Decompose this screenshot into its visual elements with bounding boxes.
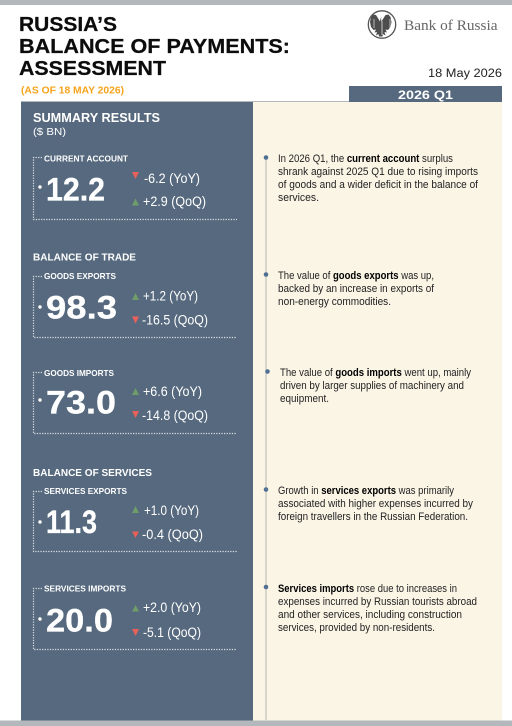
metric: current account	[34, 154, 237, 220]
commentary: goods imports: The value of goods imports went up, mainly	[280, 367, 472, 379]
metric: goods exports: GOODS EXPORTS	[44, 272, 117, 281]
metric: goods imports: +6.6 (YoY)	[143, 384, 202, 399]
metric: goods imports	[34, 369, 237, 434]
metric: current account: -6.2 (YoY)	[144, 171, 200, 186]
metric: services imports	[34, 584, 237, 650]
commentary: current account: of goods and a wider deficit in the balance of	[278, 179, 479, 191]
commentary: services exports: foreign travellers in the Russian Federation.	[278, 511, 468, 523]
commentary: current account: services.	[278, 192, 319, 204]
metric: services exports: 11.3	[46, 504, 97, 540]
divider rule	[21, 101, 349, 102]
metric: goods imports: 73.0	[46, 384, 116, 420]
period tab	[349, 86, 502, 102]
logo: Bank of Russia	[368, 11, 498, 38]
metric: goods imports: GOODS IMPORTS	[44, 369, 115, 378]
metric: current account: 12.2	[46, 172, 105, 208]
metric: services imports: +2.0 (YoY)	[143, 600, 201, 615]
title: RUSSIA’S	[19, 13, 117, 36]
title	[19, 13, 290, 80]
unit label: ($ BN)	[33, 126, 66, 138]
metric: goods exports	[34, 272, 237, 338]
title: BALANCE OF PAYMENTS:	[19, 35, 290, 58]
metric: services exports: +1.0 (YoY)	[144, 503, 199, 518]
metric: services exports	[34, 487, 237, 552]
metric: goods exports: -16.5 (QoQ)	[142, 312, 208, 328]
heading: balance of services: BALANCE OF SERVICES	[33, 467, 152, 479]
panel: summary results	[21, 102, 253, 720]
commentary: goods exports	[264, 270, 435, 308]
commentary: goods exports: backed by an increase in exports of	[278, 283, 435, 295]
metric: services exports: -0.4 (QoQ)	[142, 527, 203, 542]
commentary: services imports	[264, 583, 477, 634]
top band	[0, 0, 512, 5]
commentary: goods imports: driven by larger supplies of machinery and	[280, 380, 464, 392]
commentary: goods imports: equipment.	[280, 393, 329, 405]
icon: eagle emblem	[368, 11, 396, 38]
subtitle date note: (AS OF 18 MAY 2026)	[21, 86, 124, 96]
commentary: services imports: Services imports rose due to increases in	[278, 583, 457, 595]
commentary: services imports: services, provided by non-residents.	[278, 622, 435, 634]
title: ASSESSMENT	[19, 57, 166, 80]
commentary: goods imports	[265, 367, 472, 405]
commentary: services imports: expenses incurred by Russian tourists abroad	[278, 596, 477, 608]
metric: goods imports: -14.8 (QoQ)	[142, 408, 208, 423]
panel: commentary background	[253, 102, 502, 720]
period tab: 2026 Q1	[398, 88, 453, 102]
logo wordmark: Bank of Russia	[404, 18, 498, 34]
heading: balance of trade: BALANCE OF TRADE	[33, 252, 136, 264]
timeline line	[266, 157, 267, 720]
bottom band	[0, 720, 512, 726]
metric: goods exports: 98.3	[46, 289, 117, 325]
heading: summary results: SUMMARY RESULTS	[33, 111, 160, 125]
metric: services exports: SERVICES EXPORTS	[44, 487, 128, 496]
metric: services imports: SERVICES IMPORTS	[44, 584, 127, 594]
metric: current account: +2.9 (QoQ)	[143, 194, 206, 209]
commentary: services exports: Growth in services exports was primarily	[278, 485, 455, 497]
commentary: current account	[264, 153, 479, 204]
commentary: goods exports: non-energy commodities.	[278, 296, 391, 308]
publication date: 18 May 2026	[428, 68, 502, 80]
commentary: services imports: and other services, including construction	[278, 609, 462, 621]
metric: services imports: -5.1 (QoQ)	[143, 625, 201, 640]
metric: services imports: 20.0	[46, 602, 113, 638]
commentary: services exports	[264, 485, 474, 523]
commentary: current account: In 2026 Q1, the current account surplus	[278, 153, 454, 165]
commentary: services exports: associated with higher expenses incurred by	[278, 498, 474, 510]
commentary: goods exports: The value of goods exports was up,	[278, 270, 434, 282]
commentary: current account: shrank against 2025 Q1 due to rising imports	[278, 166, 479, 178]
metric: goods exports: +1.2 (YoY)	[143, 288, 198, 304]
metric: current account: CURRENT ACCOUNT	[44, 154, 128, 164]
